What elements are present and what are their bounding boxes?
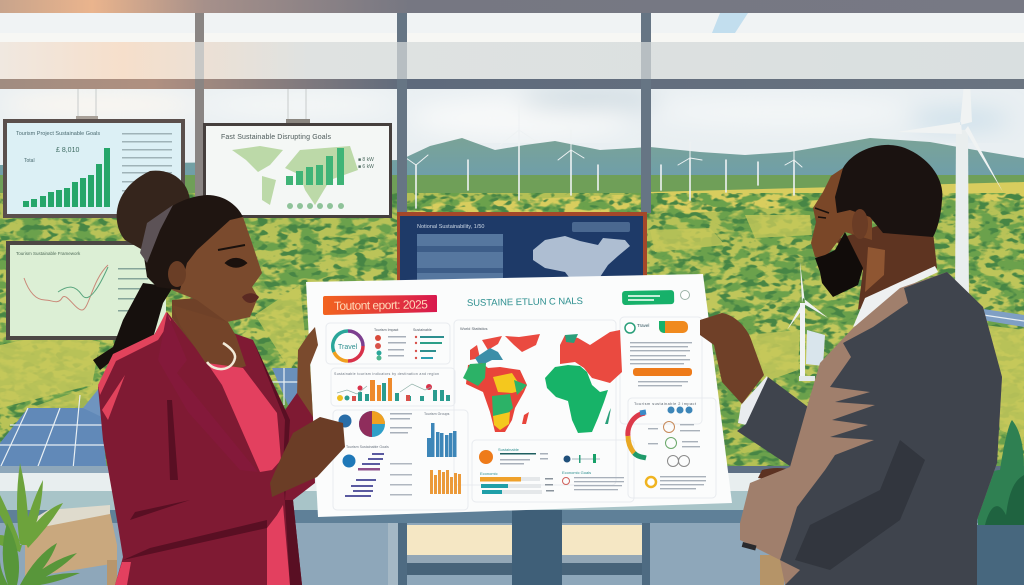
lower centre stats xyxy=(479,447,624,494)
hand holding poster xyxy=(270,417,345,497)
window frame xyxy=(0,0,1024,228)
blue bar chart xyxy=(424,412,456,457)
ear xyxy=(168,261,186,287)
woman presenter xyxy=(93,171,345,585)
face xyxy=(811,168,872,258)
necklace xyxy=(207,343,235,369)
shirt cuff xyxy=(738,376,772,425)
wall screen: map with bars xyxy=(203,123,392,218)
hair bun xyxy=(117,171,190,257)
eye and brow xyxy=(218,245,246,267)
plant: right xyxy=(970,420,1024,585)
right info panel xyxy=(625,321,692,386)
wall screen: line chart xyxy=(6,241,166,340)
lower blouse xyxy=(267,505,290,585)
horizontal bars xyxy=(342,445,412,497)
wind turbines xyxy=(406,42,1003,381)
lips xyxy=(242,293,259,303)
neck highlight xyxy=(865,247,885,292)
wall screen: bar chart: Tourism Project Sustainable Goals xyxy=(16,131,100,137)
sleeve buttons xyxy=(742,542,757,550)
neck and chest xyxy=(172,298,246,374)
beard xyxy=(815,232,863,297)
multi-colour bar chart xyxy=(334,372,450,401)
poster tag xyxy=(622,290,690,305)
neck xyxy=(835,225,937,310)
jacket dark area xyxy=(780,272,1002,585)
horizontal bars: Tourism Sustainable Goals xyxy=(346,445,389,449)
lower counter and wall xyxy=(0,466,1024,585)
pie chart xyxy=(338,411,412,437)
multi-colour bar chart: Sustainable tourism indicators by destination and region xyxy=(334,372,439,376)
hair cap xyxy=(143,195,243,290)
world map left: colourful Africa and Europe xyxy=(460,326,540,432)
orange bar chart xyxy=(430,470,461,494)
man presenter xyxy=(700,145,1002,585)
wall screen: bar chart xyxy=(3,119,185,218)
world map right: green Africa, red Asia xyxy=(545,330,622,433)
second hand xyxy=(758,468,792,482)
poster header button xyxy=(323,295,437,315)
face xyxy=(172,217,262,322)
side table with book xyxy=(25,505,117,585)
shoulder highlight xyxy=(98,312,171,420)
wall screen: map with bars: Fast Sustainable Disrupting Goals xyxy=(221,134,332,141)
lapel xyxy=(158,313,258,472)
wall screen: line chart: Tourism Sustainable Framework xyxy=(16,251,81,256)
lower centre stats: Economic Goals xyxy=(562,470,591,475)
eye and brow xyxy=(815,208,829,218)
lower centre stats: Sustainable xyxy=(498,447,520,452)
dashboard monitor behind poster xyxy=(397,212,647,287)
left hand on poster xyxy=(700,313,764,404)
forearm sleeve xyxy=(737,377,808,468)
headband xyxy=(140,205,173,263)
mountains xyxy=(0,138,1024,195)
braid xyxy=(93,283,173,370)
legend rows: Sustainable xyxy=(413,328,432,332)
blouse xyxy=(207,363,281,472)
legend rows xyxy=(374,328,444,360)
lower centre stats: Economic xyxy=(480,471,498,476)
hand at poster edge xyxy=(297,327,318,417)
dashboard monitor behind poster: Notional Sustainability, 1/50 xyxy=(417,224,484,230)
blazer hem and shadows xyxy=(123,340,302,585)
panel outlines xyxy=(326,317,716,510)
blue bar chart: Tourism Groups xyxy=(424,412,450,416)
poster title: SUSTAINE ETLUN C NALS xyxy=(467,296,583,309)
blazer xyxy=(98,312,315,585)
jacket lit area xyxy=(740,272,1002,585)
ear xyxy=(852,209,868,239)
wall screen: map with bars: ■ 6 kW xyxy=(358,164,374,170)
plant: left xyxy=(0,463,80,585)
donut chart: Travel xyxy=(338,344,358,351)
shirt collar xyxy=(853,266,938,327)
right info panel: Travel xyxy=(637,323,649,328)
gauge and indicators panel xyxy=(628,402,706,489)
wall screen: map with bars: ■ 8 kW xyxy=(358,157,374,163)
wall screen: bar chart: Total xyxy=(24,158,35,164)
poster: tourism report xyxy=(306,274,732,517)
world map left: colourful Africa and Europe: World Statistics xyxy=(460,326,488,331)
hair xyxy=(835,145,942,237)
open yellow fields xyxy=(0,215,1024,440)
gauge and indicators panel: Tourism sustainable 2 impact xyxy=(634,402,697,406)
jacket shadow xyxy=(795,440,925,570)
wall screen: bar chart: £ 8,010 xyxy=(56,147,79,154)
tree texture xyxy=(0,193,1024,475)
lower left lining xyxy=(115,562,131,585)
poster header button: Toutont eport: 2025 xyxy=(334,297,428,313)
donut chart xyxy=(333,331,363,361)
solar panels xyxy=(0,307,1024,484)
skin V above blouse xyxy=(172,305,246,374)
legend rows: Tourism Impact xyxy=(374,328,398,332)
